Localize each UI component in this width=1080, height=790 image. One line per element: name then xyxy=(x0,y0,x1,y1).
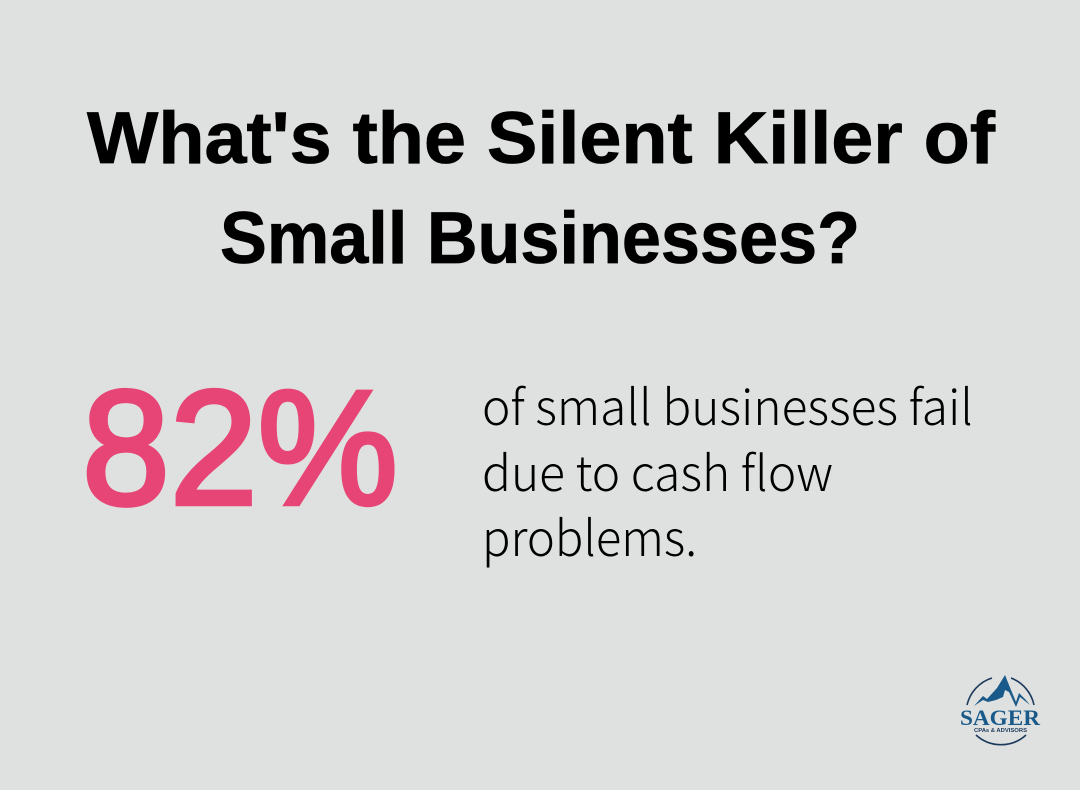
description text xyxy=(482,369,973,571)
logo ring xyxy=(967,678,1034,745)
description text: due to cash flow xyxy=(482,435,833,506)
title xyxy=(87,98,996,279)
logo mountain xyxy=(974,675,1030,707)
logo wordmark: SAGER xyxy=(960,705,1041,730)
description text: problems. xyxy=(482,500,697,571)
logo: Sager CPAs & Advisors xyxy=(960,675,1041,745)
statistic: 82%: 82% xyxy=(82,356,398,539)
title: Small Businesses? xyxy=(220,198,860,279)
logo tagline: CPAs & ADVISORS xyxy=(974,728,1027,734)
title: What's the Silent Killer of xyxy=(87,98,996,179)
description text: of small businesses fail xyxy=(482,369,973,440)
